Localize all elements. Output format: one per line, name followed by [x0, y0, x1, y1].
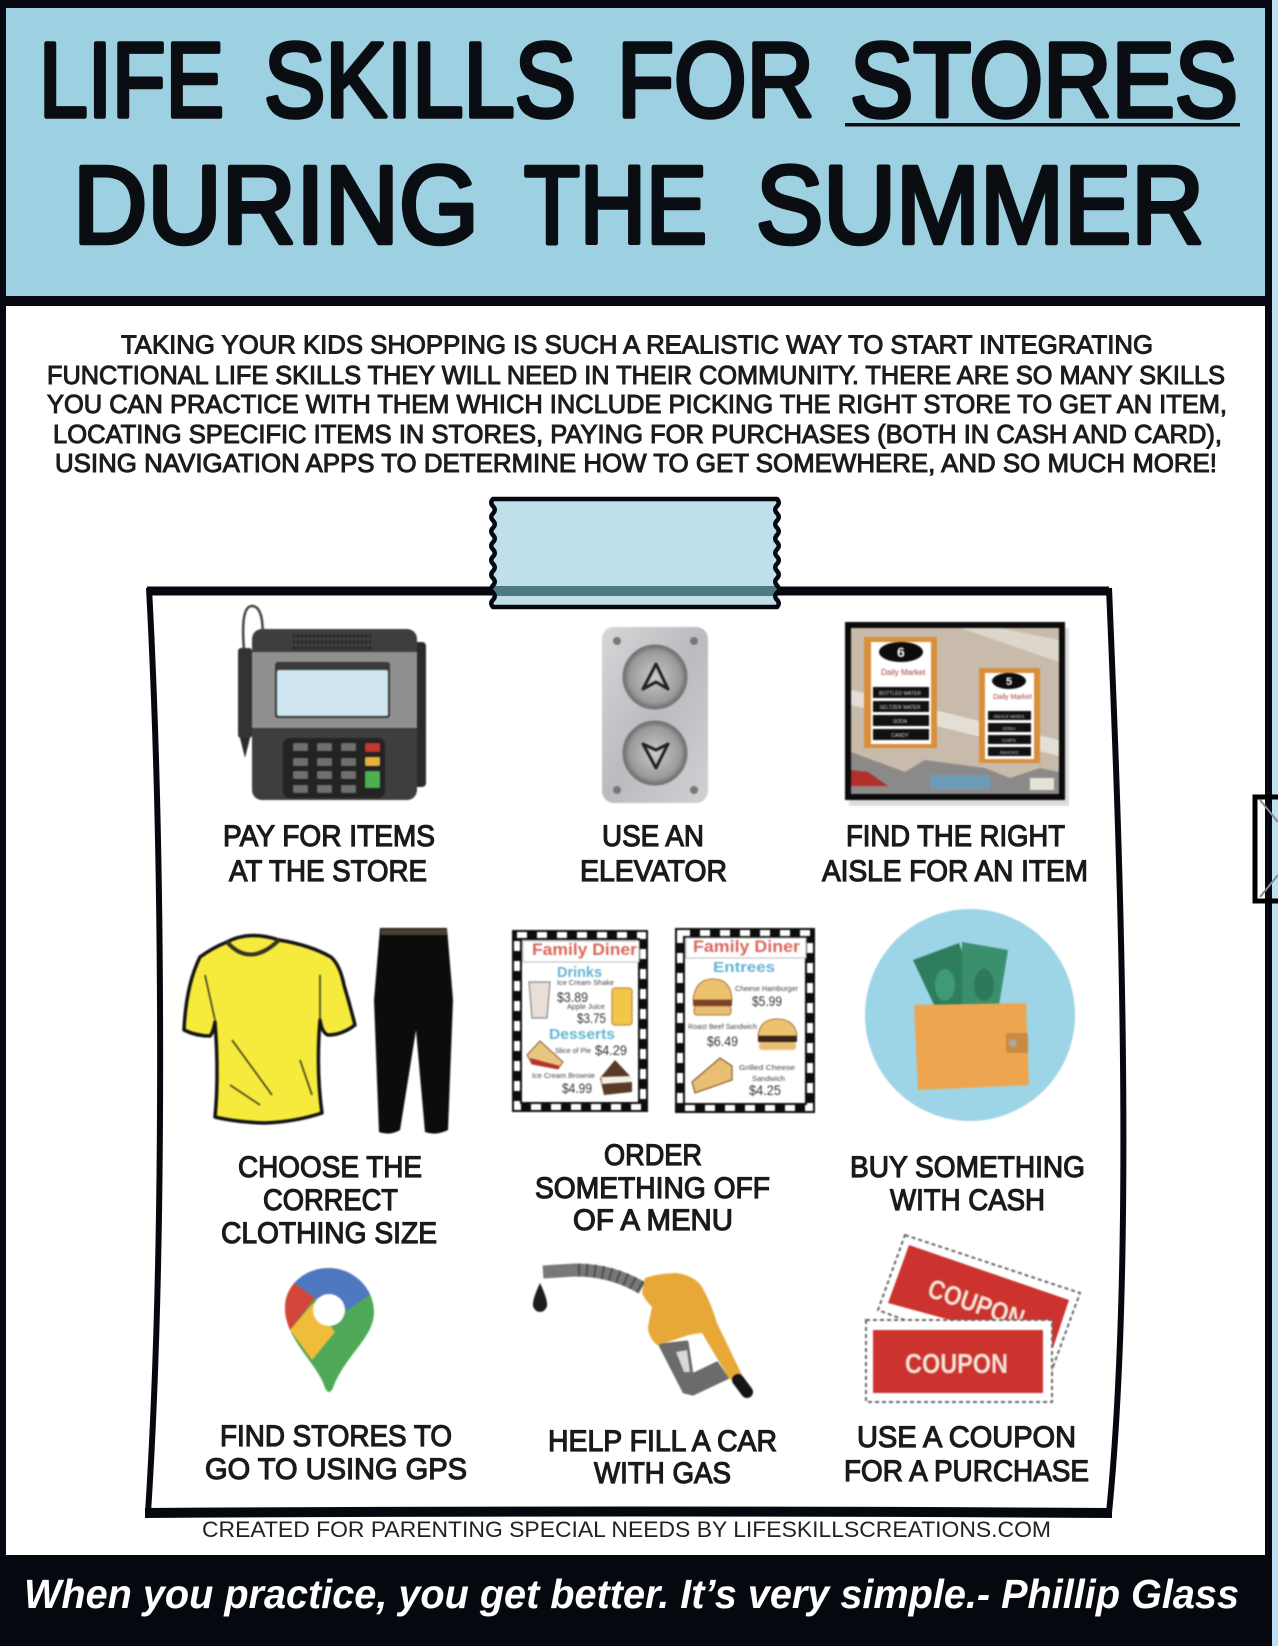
title line 1	[39, 22, 1240, 140]
icon: entrees menu: $4.25	[749, 1082, 781, 1098]
taped note frame	[145, 588, 1123, 1513]
icon: drinks and desserts menu: Apple Juice	[567, 1004, 605, 1011]
icon: aisle signs photo: SELTZER WATER	[879, 705, 921, 711]
icon: entrees menu: Sandwich	[752, 1076, 785, 1083]
label: AISLE FOR AN ITEM	[822, 855, 1088, 888]
icon: aisle signs photo: CANDY	[891, 733, 909, 739]
icon: aisle signs photo: BOTTLED WATER	[879, 691, 921, 697]
item: use an elevator	[580, 627, 727, 888]
title line 2: DURING	[73, 144, 479, 267]
label	[205, 1420, 467, 1486]
label: ELEVATOR	[580, 855, 727, 888]
label: OF A MENU	[573, 1204, 733, 1237]
label	[221, 1151, 437, 1250]
title line 2: THE	[524, 144, 707, 267]
intro paragraph: LOCATING SPECIFIC ITEMS IN STORES, PAYING FOR PURCHASES (BOTH IN CASH AND CARD),	[53, 421, 1222, 449]
icon: drinks and desserts menu: $3.75	[577, 1010, 606, 1026]
label: SOMETHING OFF	[535, 1172, 770, 1205]
icon: aisle signs photo: CHIPS	[1002, 738, 1016, 743]
item: buy with cash	[850, 909, 1085, 1217]
label: PAY FOR ITEMS	[223, 820, 435, 853]
label: FIND THE RIGHT	[846, 820, 1065, 853]
title line 1: LIFE	[39, 22, 224, 140]
icon: map pin	[284, 1267, 375, 1393]
icon: elevator buttons	[602, 627, 708, 803]
label	[580, 820, 727, 888]
icon: drinks and desserts menu: Desserts	[549, 1026, 615, 1043]
icon: entrees menu: Grilled Cheese	[739, 1065, 795, 1072]
label: FOR A PURCHASE	[844, 1455, 1089, 1488]
icon: black pants	[374, 928, 453, 1134]
label: BUY SOMETHING	[850, 1151, 1085, 1184]
intro paragraph	[47, 332, 1227, 478]
label	[223, 820, 435, 888]
icon: aisle signs photo: Daily Market	[993, 694, 1032, 701]
label: WITH GAS	[594, 1457, 731, 1490]
icon: entrees menu: $6.49	[707, 1033, 738, 1049]
title line 1: FOR	[617, 22, 814, 140]
icon: aisle signs photo: SODA	[1003, 726, 1015, 731]
icon: entrees menu: Cheese Hamburger	[735, 986, 799, 993]
icon: drinks and desserts menu: Ice Cream Shake	[557, 980, 614, 987]
page border left	[0, 0, 6, 1646]
icon: entrees menu: $5.99	[752, 993, 782, 1009]
icon: drinks and desserts menu: Family Diner	[532, 940, 637, 959]
icon: drinks and desserts menu: $4.99	[562, 1080, 592, 1096]
label: CHOOSE THE	[238, 1151, 422, 1184]
title line 2: SUMMER	[756, 144, 1204, 267]
label: CORRECT	[263, 1184, 398, 1217]
title line 2	[73, 144, 1204, 267]
icon: wallet with money	[865, 909, 1075, 1121]
label	[850, 1151, 1085, 1217]
item: order off a menu	[517, 933, 810, 1237]
tape	[491, 499, 779, 607]
icon: coupons: COUPON	[924, 1273, 1028, 1334]
icon: aisle signs photo: Daily Market	[881, 668, 926, 677]
title banner	[0, 0, 1272, 306]
intro paragraph: YOU CAN PRACTICE WITH THEM WHICH INCLUDE PICKING THE RIGHT STORE TO GET AN ITEM,	[47, 391, 1227, 419]
icon: yellow t-shirt	[184, 935, 355, 1123]
broken image marker at right edge	[1255, 797, 1278, 901]
icon: gas nozzle	[533, 1270, 747, 1394]
icon: aisle signs photo: SODA	[893, 719, 908, 725]
label: ORDER	[604, 1139, 702, 1172]
intro paragraph: USING NAVIGATION APPS TO DETERMINE HOW TO GET SOMEWHERE, AND SO MUCH MORE!	[55, 450, 1217, 478]
label: AT THE STORE	[229, 855, 427, 888]
label: WITH CASH	[890, 1184, 1045, 1217]
item: fill a car with gas	[533, 1270, 777, 1490]
icon: drinks and desserts menu: Ice Cream Brownie	[532, 1073, 595, 1080]
item: pay for items	[223, 606, 435, 888]
label: USE AN	[602, 820, 704, 853]
intro paragraph: TAKING YOUR KIDS SHOPPING IS SUCH A REALISTIC WAY TO START INTEGRATING	[121, 332, 1153, 360]
label	[535, 1139, 770, 1237]
right edge strip	[1272, 0, 1278, 1646]
item: find the right aisle	[822, 622, 1088, 888]
icon: entrees menu	[680, 933, 810, 1108]
item: find stores using GPS	[205, 1262, 467, 1486]
quote bar	[0, 1555, 1272, 1646]
icon: entrees menu: Entrees	[713, 959, 775, 976]
label	[844, 1421, 1089, 1488]
icon: entrees menu: Roast Beef Sandwich	[688, 1024, 757, 1031]
icon: drinks and desserts menu	[517, 935, 643, 1107]
icon: card terminal	[238, 606, 426, 800]
label: GO TO USING GPS	[205, 1453, 467, 1486]
label: HELP FILL A CAR	[548, 1425, 777, 1458]
icon: aisle signs photo: SNACKS	[1000, 750, 1018, 755]
icon: aisle signs photo: SNACK MIXES	[994, 714, 1024, 719]
icon: drinks and desserts menu: Drinks	[557, 964, 602, 981]
icon: drinks and desserts menu: $3.89	[557, 989, 588, 1005]
title line 1: STORES	[850, 22, 1238, 140]
icon: entrees menu: Family Diner	[693, 937, 800, 956]
page border right	[1265, 0, 1272, 1646]
icon: aisle signs photo	[845, 622, 1069, 806]
label	[822, 820, 1088, 888]
item: use a coupon	[844, 1235, 1089, 1488]
icon: drinks and desserts menu: Slice of Pie	[555, 1048, 591, 1055]
icon: coupons	[866, 1235, 1080, 1402]
intro paragraph: FUNCTIONAL LIFE SKILLS THEY WILL NEED IN THEIR COMMUNITY. THERE ARE SO MANY SKILLS	[47, 362, 1225, 390]
icon: coupons: COUPON	[905, 1348, 1008, 1379]
label: FIND STORES TO	[220, 1420, 452, 1453]
item: choose clothing size	[184, 928, 453, 1250]
icon: drinks and desserts menu: $4.29	[595, 1042, 627, 1058]
label: USE A COUPON	[857, 1421, 1076, 1454]
label: CLOTHING SIZE	[221, 1217, 437, 1250]
label	[548, 1425, 777, 1490]
icon: aisle signs photo: 5	[1006, 676, 1012, 688]
quote bar: When you practice, you get better. It’s very simple.- Phillip Glass	[24, 1571, 1239, 1617]
credit line: CREATED FOR PARENTING SPECIAL NEEDS BY LIFESKILLSCREATIONS.COM	[202, 1517, 1051, 1542]
title line 1: SKILLS	[264, 22, 576, 140]
icon: aisle signs photo: 6	[897, 644, 905, 660]
